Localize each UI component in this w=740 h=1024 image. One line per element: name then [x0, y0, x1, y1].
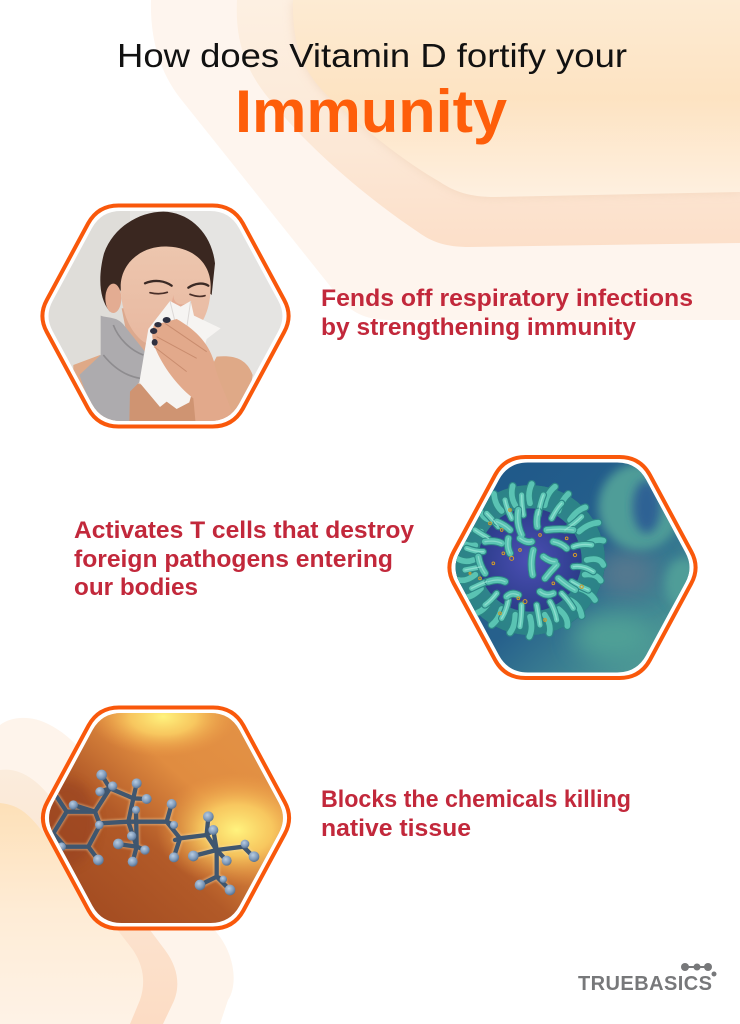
text: T cells: our bodies — [74, 574, 198, 601]
logo icon: three linked dots — [681, 963, 712, 971]
logo wordmark: TRUEBASICS — [578, 973, 712, 995]
hexagon frame — [449, 457, 696, 678]
hexagon frame — [43, 708, 289, 928]
image: vitamin D molecule — [49, 713, 283, 923]
text: respiratory infections: by strengthening immunity — [321, 314, 637, 341]
background shapes: top right — [151, 0, 740, 320]
text: respiratory infections: Fends off respiratory infections — [321, 285, 693, 312]
panel: T cell hexagon image — [447, 455, 698, 680]
title highlight: Immunity: Immunity — [235, 78, 508, 145]
panel: respiratory infections hexagon photo — [40, 204, 291, 428]
text: blocks chemicals: native tissue — [321, 815, 471, 842]
text: T cells: Activates T cells that destroy — [74, 517, 415, 544]
orange surface particles — [469, 509, 583, 621]
title — [117, 37, 627, 145]
text: respiratory infections — [321, 285, 693, 341]
photo: woman sneezing into a tissue — [48, 211, 282, 421]
panel: molecule hexagon image — [40, 706, 292, 930]
molecule glow — [53, 775, 253, 890]
title line: How does Vitamin D fortify your: How does Vitamin D fortify your — [117, 37, 627, 74]
hexagon frame — [42, 206, 289, 426]
molecule bonds — [53, 775, 253, 890]
image: T cell 3D render — [456, 462, 690, 672]
molecule atoms — [57, 770, 259, 895]
text: T cells: foreign pathogens entering — [74, 546, 393, 573]
logo: TrueBasics — [578, 963, 716, 995]
text: T cells — [74, 517, 415, 601]
tendrils — [457, 484, 603, 637]
background shapes: bottom left — [0, 718, 234, 1024]
registered mark — [712, 972, 716, 976]
text: blocks chemicals: Blocks the chemicals killing — [321, 786, 631, 813]
text: blocks chemicals — [321, 786, 631, 842]
